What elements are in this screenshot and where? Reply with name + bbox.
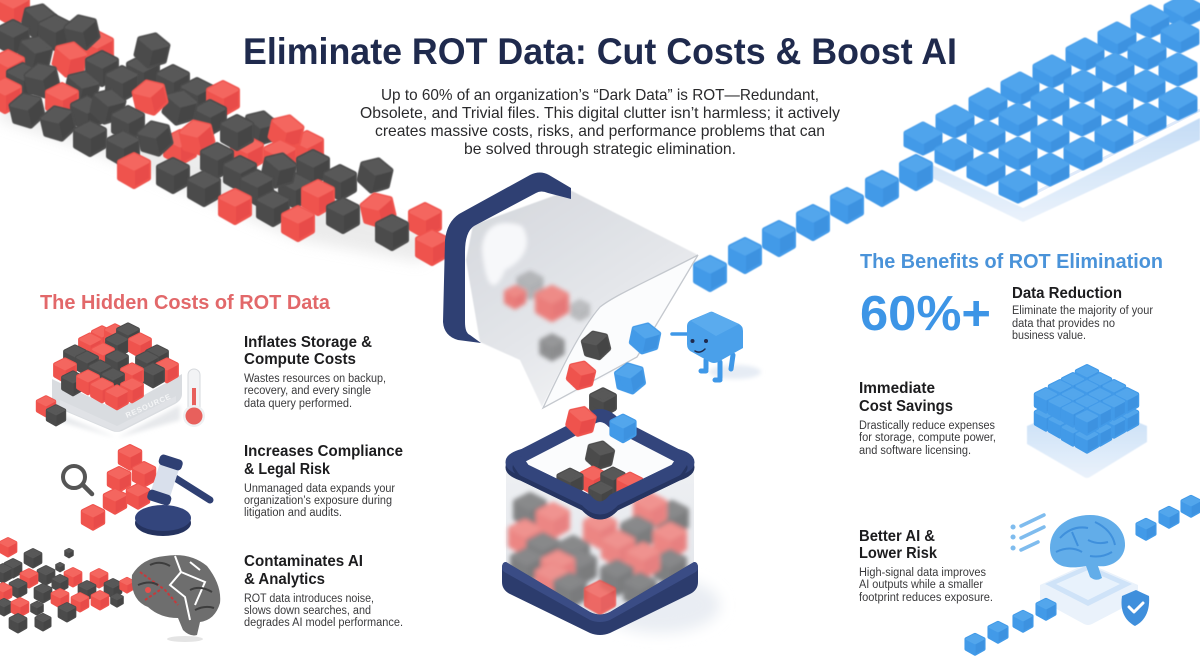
item: inflates storage: recovery, and every single xyxy=(244,385,371,397)
intro paragraph: Up to 60% of an organization’s “Dark Data” is ROT—Redundant, xyxy=(381,87,819,104)
item: cost savings: and software licensing. xyxy=(859,445,971,457)
intro paragraph: creates massive costs, risks, and performance problems that can xyxy=(375,123,825,140)
icon: blue cube stack on tray xyxy=(1027,366,1147,478)
intro paragraph: be solved through strategic elimination. xyxy=(464,141,736,158)
icon: resource bin with thermometer: RESOURCE xyxy=(124,392,172,420)
item: inflates storage xyxy=(244,334,386,410)
blurred cubes in bin xyxy=(511,495,687,606)
item: inflates storage: Inflates Storage & xyxy=(244,334,372,351)
blue cube stream xyxy=(696,157,931,289)
item: compliance: litigation and audits. xyxy=(244,507,342,519)
item: data reduction: data that provides no xyxy=(1012,318,1115,330)
item: contaminates AI: Contaminates AI xyxy=(244,553,363,570)
magnifier xyxy=(63,466,92,494)
bin rim back xyxy=(512,420,688,513)
item: cost savings: Immediate xyxy=(859,380,935,397)
blue cube grid on tray xyxy=(905,0,1200,222)
item: better AI: Lower Risk xyxy=(859,545,937,562)
collection bin xyxy=(502,406,720,635)
heading: hidden costs: The Hidden Costs of ROT Data xyxy=(40,292,331,314)
title: Eliminate ROT Data: Cut Costs & Boost AI xyxy=(243,31,957,72)
cubes inside bin rim xyxy=(559,441,642,506)
item: contaminates AI: & Analytics xyxy=(244,571,325,588)
item: inflates storage: Wastes resources on backup, xyxy=(244,373,386,385)
item: compliance: Unmanaged data expands your xyxy=(244,483,395,495)
icon: cubes contaminating cracked brain xyxy=(0,539,220,642)
falling cubes: rejected and kept xyxy=(567,323,661,415)
list lines xyxy=(1013,515,1044,550)
gavel xyxy=(135,453,210,536)
item: better AI: High-signal data improves xyxy=(859,567,986,579)
item: compliance: organization’s exposure during xyxy=(244,495,392,507)
cube stream: dark and red ROT data xyxy=(0,0,447,263)
cracked brain xyxy=(132,555,220,642)
item: better AI: footprint reduces exposure. xyxy=(859,592,993,604)
item: better AI: AI outputs while a smaller xyxy=(859,579,983,591)
item: data reduction: Data Reduction xyxy=(1012,285,1122,302)
item: contaminates AI xyxy=(244,553,403,629)
item: data reduction: Eliminate the majority of your xyxy=(1012,305,1153,317)
item: data reduction xyxy=(1012,285,1153,342)
thermometer xyxy=(183,369,205,427)
smiling blue cube character xyxy=(672,312,761,380)
item: compliance: Increases Compliance xyxy=(244,443,403,460)
bin base xyxy=(502,562,698,635)
blue cube trails xyxy=(966,497,1200,654)
icon: cubes, magnifier and gavel xyxy=(63,446,210,536)
item: inflates storage: data query performed. xyxy=(244,398,352,410)
item: contaminates AI: degrades AI model performance. xyxy=(244,617,403,629)
icon: blue brain on platform with shield xyxy=(1013,515,1149,626)
item: contaminates AI: ROT data introduces noise, xyxy=(244,593,374,605)
item: inflates storage: Compute Costs xyxy=(244,351,356,368)
intro paragraph: Obsolete, and Trivial files. This digital clutter isn’t harmless; it actively xyxy=(360,105,840,122)
intro paragraph xyxy=(360,87,840,158)
item: data reduction: business value. xyxy=(1012,330,1086,342)
item: cost savings: Drastically reduce expenses xyxy=(859,420,995,432)
item: contaminates AI: slows down searches, and xyxy=(244,605,371,617)
blurred cubes inside funnel xyxy=(506,273,589,359)
item: cost savings xyxy=(859,380,996,457)
item: cost savings: Cost Savings xyxy=(859,398,953,415)
item: better AI xyxy=(859,528,993,604)
icon: resource bin with thermometer xyxy=(38,324,205,438)
item: compliance: & Legal Risk xyxy=(244,461,330,478)
funnel xyxy=(443,172,698,408)
item: compliance xyxy=(244,443,403,519)
shield xyxy=(1122,590,1149,626)
stat: 60%+: 60%+ xyxy=(860,287,991,341)
item: cost savings: for storage, compute power, xyxy=(859,432,996,444)
item: better AI: Better AI & xyxy=(859,528,935,545)
bin rim front xyxy=(519,468,681,513)
heading: benefits: The Benefits of ROT Elimination xyxy=(860,251,1163,273)
